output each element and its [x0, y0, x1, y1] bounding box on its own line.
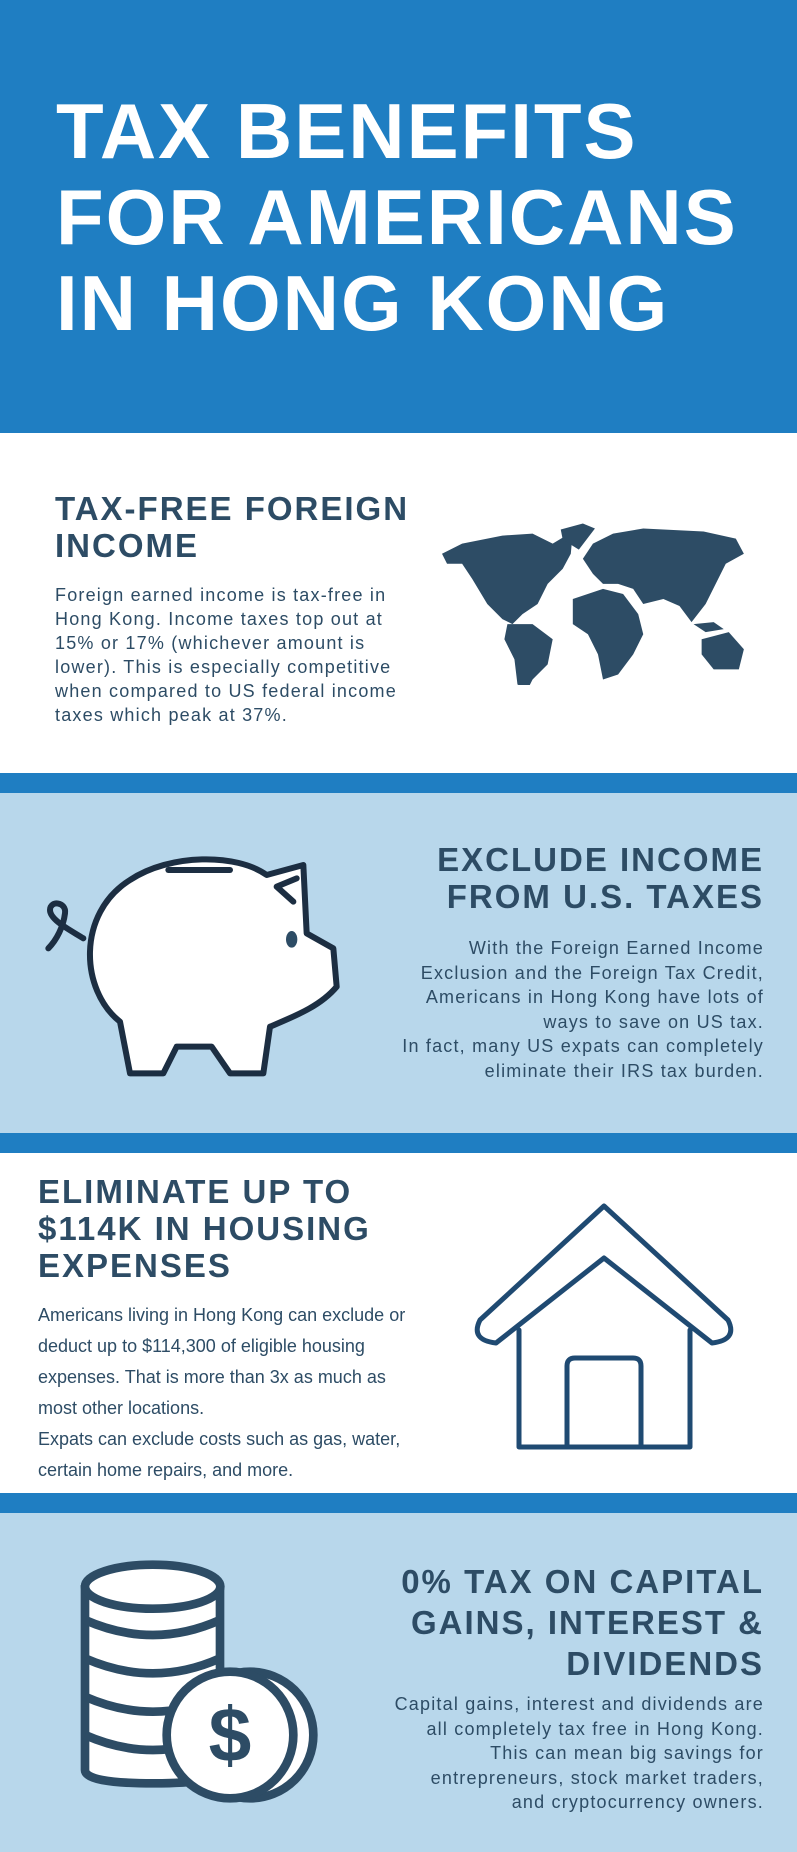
panel: exclude income from US taxes: [0, 793, 797, 1133]
heading: EXPENSES: [38, 1247, 232, 1284]
heading: 0% TAX ON CAPITAL: [401, 1563, 764, 1600]
text block: deduct up to $114,300 of eligible housing: [38, 1336, 365, 1356]
text block: taxes which peak at 37%.: [55, 705, 288, 725]
text block: Expats can exclude costs such as gas, water,: [38, 1429, 400, 1449]
heading: $114K IN HOUSING: [38, 1210, 371, 1247]
panel: capital gains: [0, 1513, 797, 1852]
text block: This can mean big savings for: [490, 1743, 764, 1763]
text block: Americans in Hong Kong have lots of: [426, 987, 764, 1007]
text block: Capital gains, interest and dividends are: [395, 1694, 764, 1714]
text block: Foreign earned income is tax-free in: [55, 585, 386, 605]
text block: and cryptocurrency owners.: [512, 1792, 764, 1812]
heading: [55, 490, 409, 564]
text block: Americans living in Hong Kong can exclude or: [38, 1305, 405, 1325]
text block: [395, 1694, 764, 1812]
text block: lower). This is especially competitive: [55, 657, 391, 677]
text block: eliminate their IRS tax burden.: [485, 1061, 764, 1081]
text block: Hong Kong. Income taxes top out at: [55, 609, 383, 629]
heading: EXCLUDE INCOME: [437, 841, 764, 878]
heading: TAX-FREE FOREIGN: [55, 490, 409, 527]
icon: world map: [442, 524, 744, 685]
heading: INCOME: [55, 527, 199, 564]
text block: ways to save on US tax.: [543, 1012, 764, 1032]
text block: all completely tax free in Hong Kong.: [426, 1718, 764, 1738]
title: TAX BENEFITS: [56, 87, 638, 175]
heading: ELIMINATE UP TO: [38, 1173, 352, 1210]
text block: 15% or 17% (whichever amount is: [55, 633, 365, 653]
title: FOR AMERICANS: [56, 173, 738, 261]
text block: expenses. That is more than 3x as much as: [38, 1367, 386, 1387]
text block: Exclusion and the Foreign Tax Credit,: [421, 963, 764, 983]
icon: piggy bank: [45, 856, 340, 1076]
icon: house: [474, 1203, 734, 1450]
heading: FROM U.S. TAXES: [447, 878, 764, 915]
heading: GAINS, INTEREST &: [411, 1604, 764, 1641]
icon: coins: [80, 1560, 318, 1803]
title: IN HONG KONG: [56, 259, 669, 347]
panel: tax-free foreign income: [0, 433, 797, 773]
text block: With the Foreign Earned Income: [469, 938, 764, 958]
heading: DIVIDENDS: [566, 1645, 764, 1682]
text block: entrepreneurs, stock market traders,: [431, 1768, 764, 1788]
text block: when compared to US federal income: [55, 681, 397, 701]
text block: [38, 1305, 405, 1480]
text block: [402, 938, 764, 1081]
icon: coins: $: [209, 1694, 251, 1779]
text block: most other locations.: [38, 1398, 204, 1418]
text block: certain home repairs, and more.: [38, 1460, 293, 1480]
text block: [55, 585, 397, 725]
panel: housing expenses: [0, 1153, 797, 1493]
heading: [437, 841, 764, 915]
heading: [38, 1173, 371, 1284]
text block: In fact, many US expats can completely: [402, 1036, 764, 1056]
header: [0, 0, 797, 433]
title: [56, 87, 738, 347]
heading: [401, 1563, 764, 1682]
